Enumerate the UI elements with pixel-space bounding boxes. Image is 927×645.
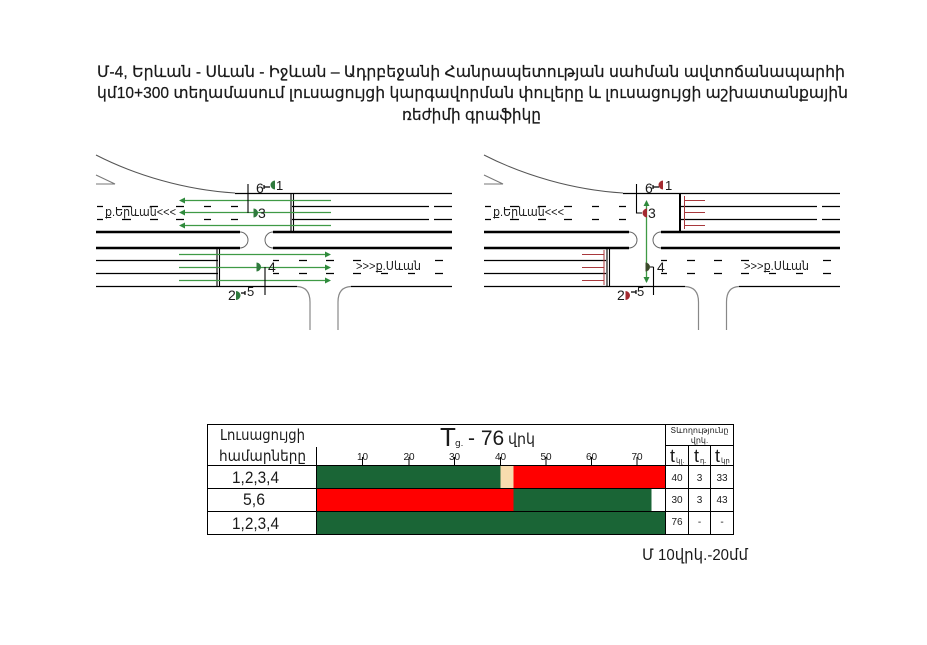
row header text: համարները <box>219 448 306 465</box>
time axis: 10 <box>357 452 368 463</box>
row header text: Լուսացույցի <box>220 427 305 444</box>
duration columns: - <box>720 517 724 528</box>
scale note: Մ 10վրկ.-20մմ <box>642 547 749 564</box>
direction labels <box>105 205 421 273</box>
duration columns: 3 <box>697 473 703 484</box>
cycle time heading: վրկ <box>508 431 535 448</box>
traffic signals: 6 <box>256 180 264 196</box>
duration columns: 43 <box>716 495 728 506</box>
row header text <box>219 427 306 533</box>
duration columns: Տևողությունը <box>670 426 728 435</box>
duration columns: t <box>670 446 675 466</box>
traffic signals: 1 <box>665 178 672 193</box>
direction labels: ք.Երևան<<< <box>105 205 176 219</box>
cycle time heading: T <box>440 422 456 452</box>
title: կմ10+300 տեղամասում լուսացույցի կարգավորման փուլերը և լուսացույցի աշխատանքային <box>97 85 848 102</box>
traffic signals: 3 <box>258 205 266 221</box>
timing bars <box>317 466 665 534</box>
red stop markers <box>582 196 705 285</box>
direction labels: ք.Երևան<<< <box>493 205 564 219</box>
time axis <box>357 452 643 465</box>
duration columns: դ. <box>700 458 707 465</box>
road layout <box>484 155 840 330</box>
cycle time heading <box>440 422 535 452</box>
duration columns <box>670 426 730 528</box>
duration columns: կլ. <box>676 458 684 465</box>
row header text: 5,6 <box>243 491 265 509</box>
direction labels <box>493 205 809 273</box>
green crossing arrow <box>644 200 650 283</box>
road layout <box>96 155 452 330</box>
time axis: 20 <box>403 452 415 463</box>
direction labels: >>>ք.Սևան <box>356 259 421 273</box>
signal timing table <box>208 422 734 534</box>
traffic signals: 4 <box>268 259 276 275</box>
table grid <box>208 424 734 534</box>
time axis: 40 <box>495 452 506 463</box>
time axis: 60 <box>586 452 597 463</box>
panel: phase 2 intersection diagram <box>484 155 840 330</box>
traffic signals: 4 <box>657 259 665 275</box>
time axis: 50 <box>540 452 552 463</box>
traffic signals: 3 <box>648 205 656 221</box>
title: ռեժիմի գրաֆիկը <box>402 107 541 124</box>
duration columns: 3 <box>697 495 703 506</box>
time axis: 70 <box>631 452 643 463</box>
duration columns: 33 <box>716 473 728 484</box>
row header text: 1,2,3,4 <box>232 515 279 533</box>
duration columns: t <box>694 446 699 466</box>
traffic signals: 5 <box>637 284 644 299</box>
traffic signals <box>228 178 283 303</box>
duration columns: t <box>715 446 720 466</box>
green traffic arrows <box>179 198 331 284</box>
title <box>97 64 848 124</box>
time axis: 30 <box>449 452 460 463</box>
traffic signals: 6 <box>645 180 653 196</box>
row header text: 1,2,3,4 <box>232 469 279 487</box>
duration columns: վրկ. <box>691 436 708 445</box>
duration columns: 76 <box>671 517 683 528</box>
traffic signals: 5 <box>247 284 254 299</box>
traffic signals: 2 <box>617 287 625 303</box>
traffic signals: 2 <box>228 287 236 303</box>
traffic signals: 1 <box>276 178 283 193</box>
duration columns: կր <box>721 458 730 465</box>
title: Մ-4, Երևան - Սևան - Իջևան – Ադրբեջանի Հանրապետության սահման ավտոճանապարհի <box>97 64 845 81</box>
cycle time heading: ց. <box>455 438 463 448</box>
cycle time heading: - 76 <box>468 427 504 450</box>
duration columns: 30 <box>671 495 683 506</box>
panel: phase 1 intersection diagram <box>96 155 452 330</box>
direction labels: >>>ք.Սևան <box>744 259 809 273</box>
traffic signals <box>617 178 672 303</box>
duration columns: - <box>698 517 701 528</box>
duration columns: 40 <box>671 473 683 484</box>
